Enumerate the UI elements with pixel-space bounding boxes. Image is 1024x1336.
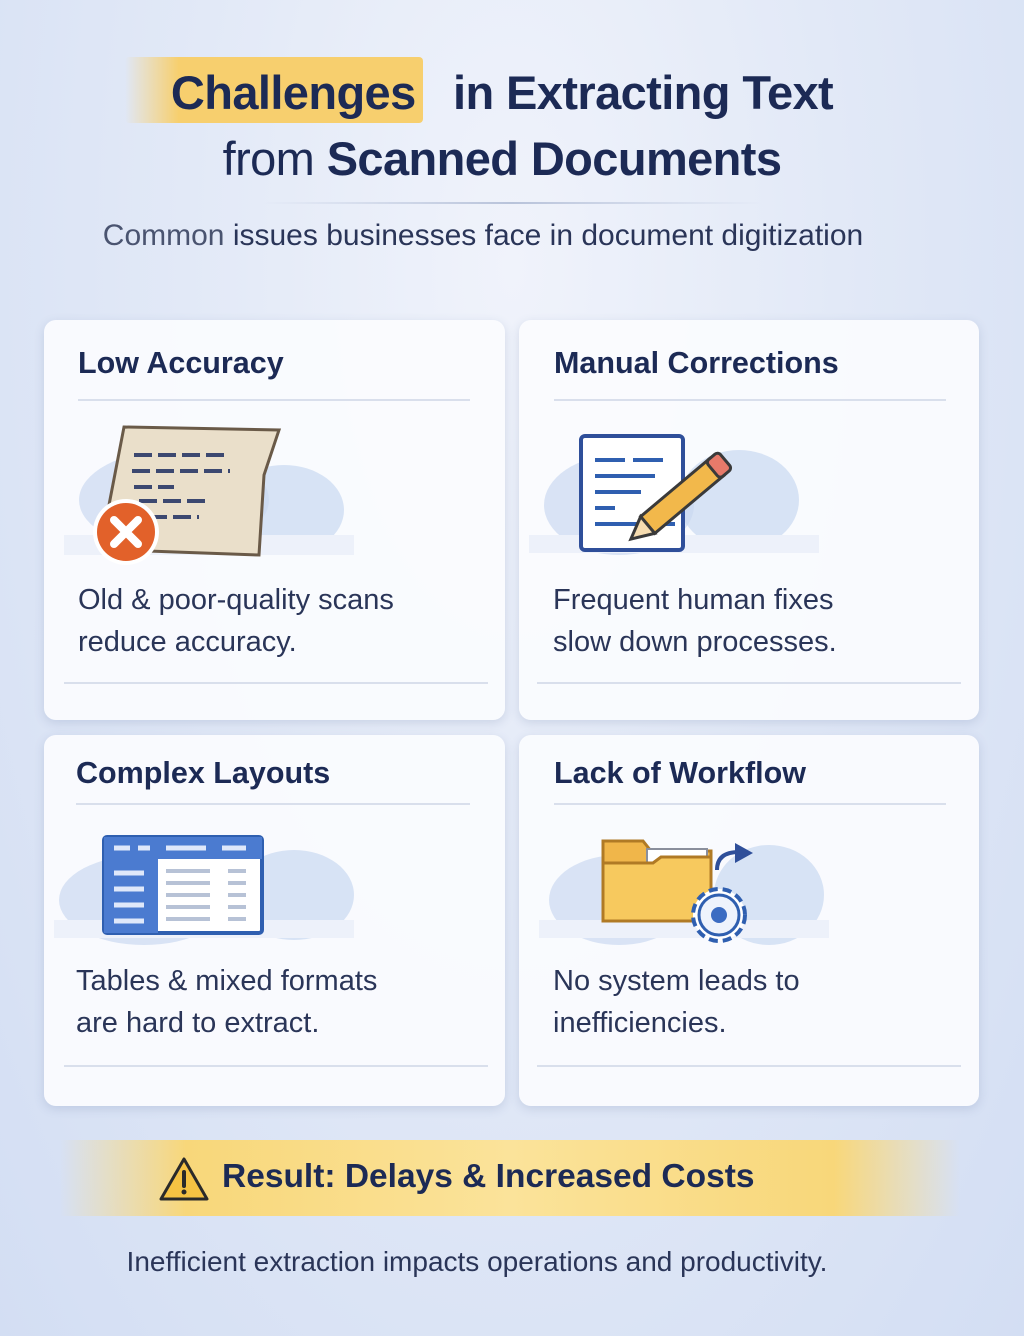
icon: warning <box>160 1157 209 1200</box>
text: manual corrections: slow down processes. <box>553 626 837 658</box>
panel: complex layouts <box>44 735 505 1106</box>
icon: damaged document with error <box>64 426 354 561</box>
icon: table <box>54 835 354 945</box>
text: complex layouts <box>76 965 377 1039</box>
heading: low accuracy: Low Accuracy <box>78 346 284 380</box>
panel: manual corrections <box>519 320 979 720</box>
icon: folder with gear <box>539 840 829 945</box>
heading: lack of workflow: Lack of Workflow <box>554 756 806 790</box>
panel: lack of workflow <box>519 735 979 1106</box>
text: manual corrections: Frequent human fixes <box>553 584 833 616</box>
icon: document with pencil <box>529 434 819 555</box>
result text: Result: Delays & Increased Costs <box>222 1158 754 1195</box>
text: complex layouts: are hard to extract. <box>76 1007 319 1039</box>
text: lack of workflow: inefficiencies. <box>553 1007 727 1039</box>
text: low accuracy <box>78 584 394 658</box>
title: from Scanned Documents <box>223 132 781 185</box>
text: lack of workflow: No system leads to <box>553 965 800 997</box>
subtitle: Common issues businesses face in document digitization <box>103 219 863 252</box>
text: lack of workflow <box>553 965 800 1039</box>
text: low accuracy: reduce accuracy. <box>78 626 297 658</box>
footer text: Inefficient extraction impacts operations and productivity. <box>127 1246 827 1277</box>
heading: manual corrections: Manual Corrections <box>554 346 839 380</box>
text: low accuracy: Old & poor-quality scans <box>78 584 394 616</box>
title highlight <box>125 57 423 123</box>
title: Challenges in Extracting Text <box>171 66 833 119</box>
text: complex layouts: Tables & mixed formats <box>76 965 377 997</box>
title <box>128 57 834 185</box>
result banner <box>60 1140 960 1216</box>
heading: complex layouts: Complex Layouts <box>76 756 330 790</box>
panel: low accuracy <box>44 320 505 720</box>
text: manual corrections <box>553 584 837 658</box>
